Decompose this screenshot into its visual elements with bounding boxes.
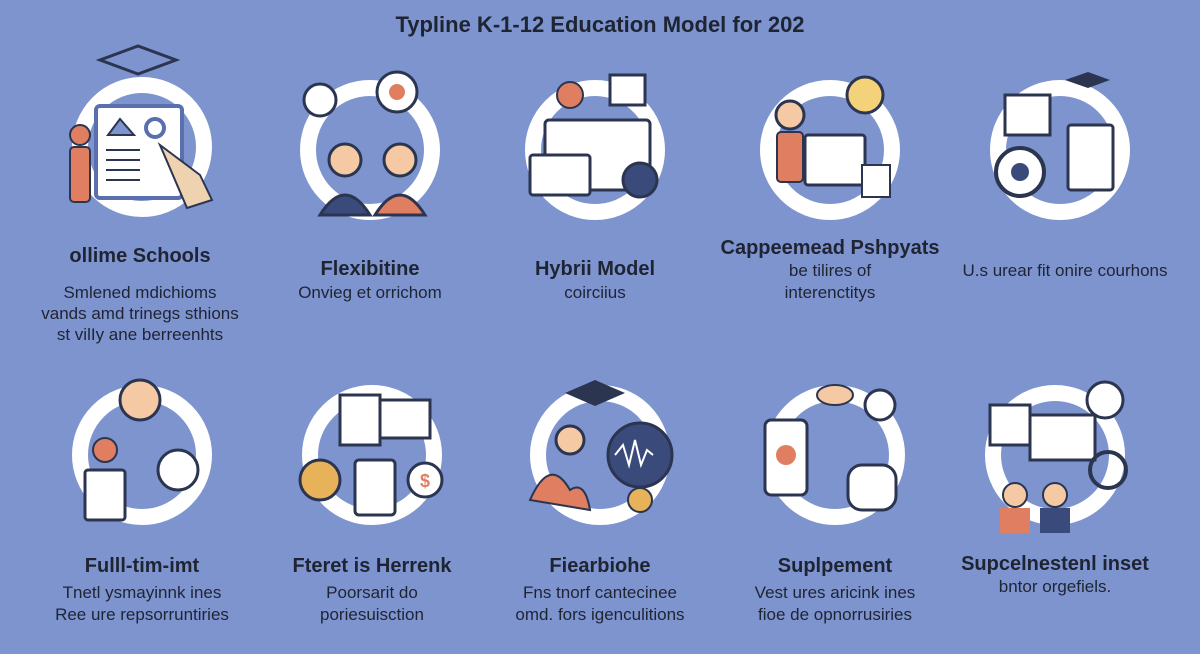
- text block: Onvieg et orrichom: [298, 283, 442, 302]
- heading: Fteret is Herrenk: [293, 555, 452, 577]
- panel: flexible: omd. fors igenculitions: [515, 605, 685, 624]
- panel: pathways: [721, 77, 939, 302]
- icon: grad with waveform: [530, 380, 672, 517]
- icon: documents and gear: [300, 393, 442, 517]
- heading: Hybrii Model: [535, 258, 655, 280]
- panel: online schools: st vilIy ane berreenhts: [57, 325, 223, 344]
- panel: interest: poriesuisction: [320, 605, 424, 624]
- panel: interest: [293, 393, 452, 624]
- icon: students: [304, 72, 432, 215]
- icon: learners with monitor: [990, 382, 1126, 533]
- icon: laptop: [530, 75, 657, 212]
- heading: Suplpement: [778, 555, 893, 577]
- heading: Fulll-tim-imt: [85, 555, 200, 577]
- panel: full-time: [55, 380, 229, 624]
- text block: Vest ures aricink ines: [755, 583, 915, 602]
- text block: Smlened mdichioms: [63, 283, 217, 302]
- title: Typline K-1-12 Education Model for 202: [395, 12, 805, 37]
- icon: phone and robot: [765, 385, 897, 517]
- panel: supplement: fioe de opnorrusiries: [758, 605, 912, 624]
- text block: Tnetl ysmayinnk ines: [63, 583, 221, 602]
- panel: hybrid model: [530, 75, 657, 302]
- text block: Poorsarit do: [326, 583, 418, 602]
- heading: Supcelnestenl inset: [961, 553, 1149, 575]
- icon: documents and gear: $: [420, 471, 430, 491]
- heading: Flexibitine: [321, 258, 419, 280]
- panel: full-time: Ree ure repsorruntiries: [55, 605, 229, 624]
- text block: be tilires of: [789, 261, 871, 280]
- panel: supplement: [755, 385, 915, 624]
- text block: coirciius: [564, 283, 626, 302]
- icon: teacher with lightbulb: [768, 77, 892, 212]
- panel: online courses: [962, 72, 1168, 280]
- text block: Fns tnorf cantecinee: [523, 583, 677, 602]
- icon: gears and docs: [996, 72, 1122, 212]
- text block: bntor orgefiels.: [999, 577, 1111, 596]
- panel: online schools: [41, 46, 239, 344]
- icon: online schools: [70, 46, 212, 209]
- panel: flexibility: [298, 72, 442, 302]
- icon: full-time learners: [80, 380, 204, 520]
- text block: U.s urear fit onire courhons: [962, 261, 1168, 280]
- panel: online schools: vands amd trinegs sthions: [41, 304, 239, 323]
- heading: Cappeemead Pshpyats: [721, 237, 939, 259]
- panel: pathways: interenctitys: [785, 283, 875, 302]
- panel: flexible: [515, 380, 685, 624]
- panel: supplemental insets: [961, 382, 1149, 596]
- heading: Fiearbiohe: [549, 555, 651, 577]
- heading: ollime Schools: [69, 245, 211, 267]
